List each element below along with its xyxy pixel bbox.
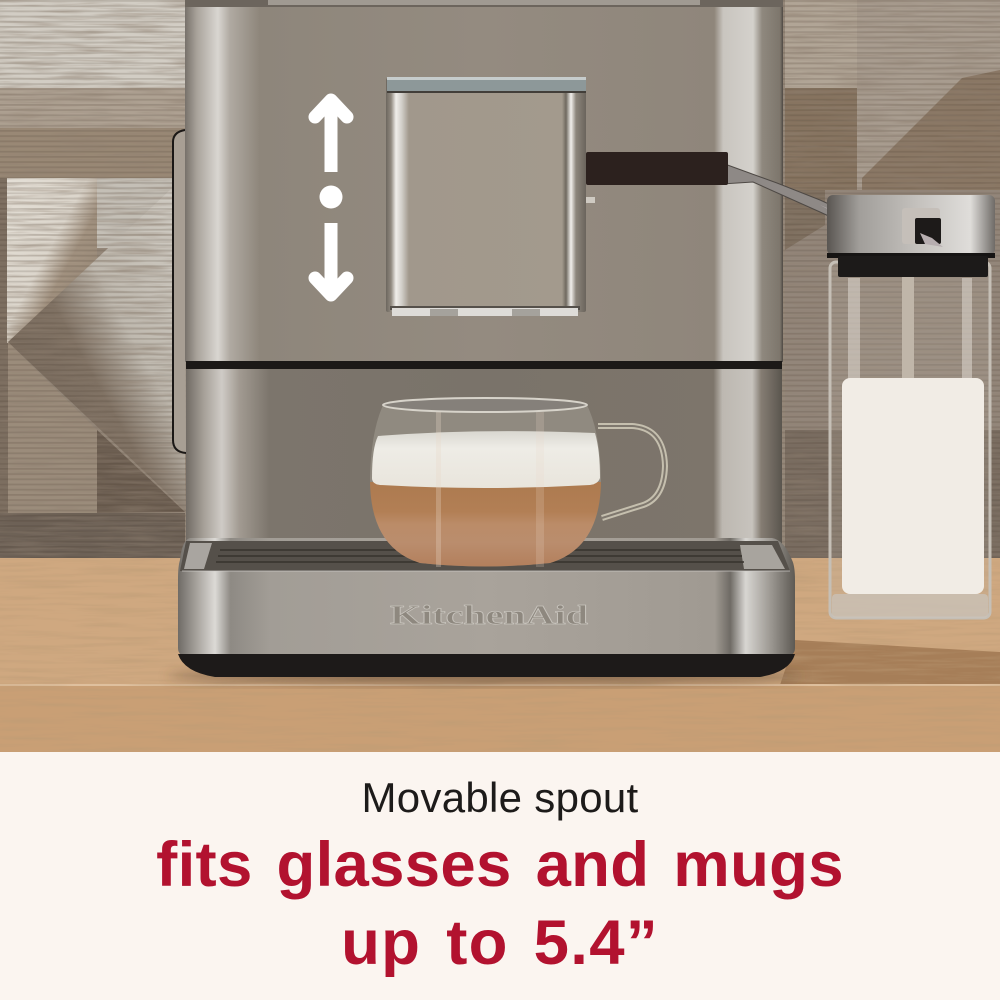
headline line 2: up to 5.4” (341, 908, 659, 978)
subheading: Movable spout (361, 774, 639, 821)
glass mug with latte (370, 398, 665, 567)
wall tiles background (0, 0, 1000, 560)
drip tray (178, 538, 795, 677)
machine upper body (185, 0, 783, 362)
wooden counter (0, 558, 1000, 752)
milk carafe (827, 195, 995, 618)
photo: coffee machine on a wooden counter (0, 0, 1000, 752)
movable spout (386, 77, 595, 316)
milk arm (586, 152, 943, 253)
text panel background (0, 752, 1000, 1000)
machine lower body (186, 361, 782, 548)
headline line 1: fits glasses and mugs (156, 830, 844, 900)
icon: up and down arrows with centre dot (315, 100, 347, 295)
water tank handle (173, 130, 186, 453)
logo: KitchenAid (390, 600, 588, 630)
machine shadow on counter (167, 668, 803, 684)
